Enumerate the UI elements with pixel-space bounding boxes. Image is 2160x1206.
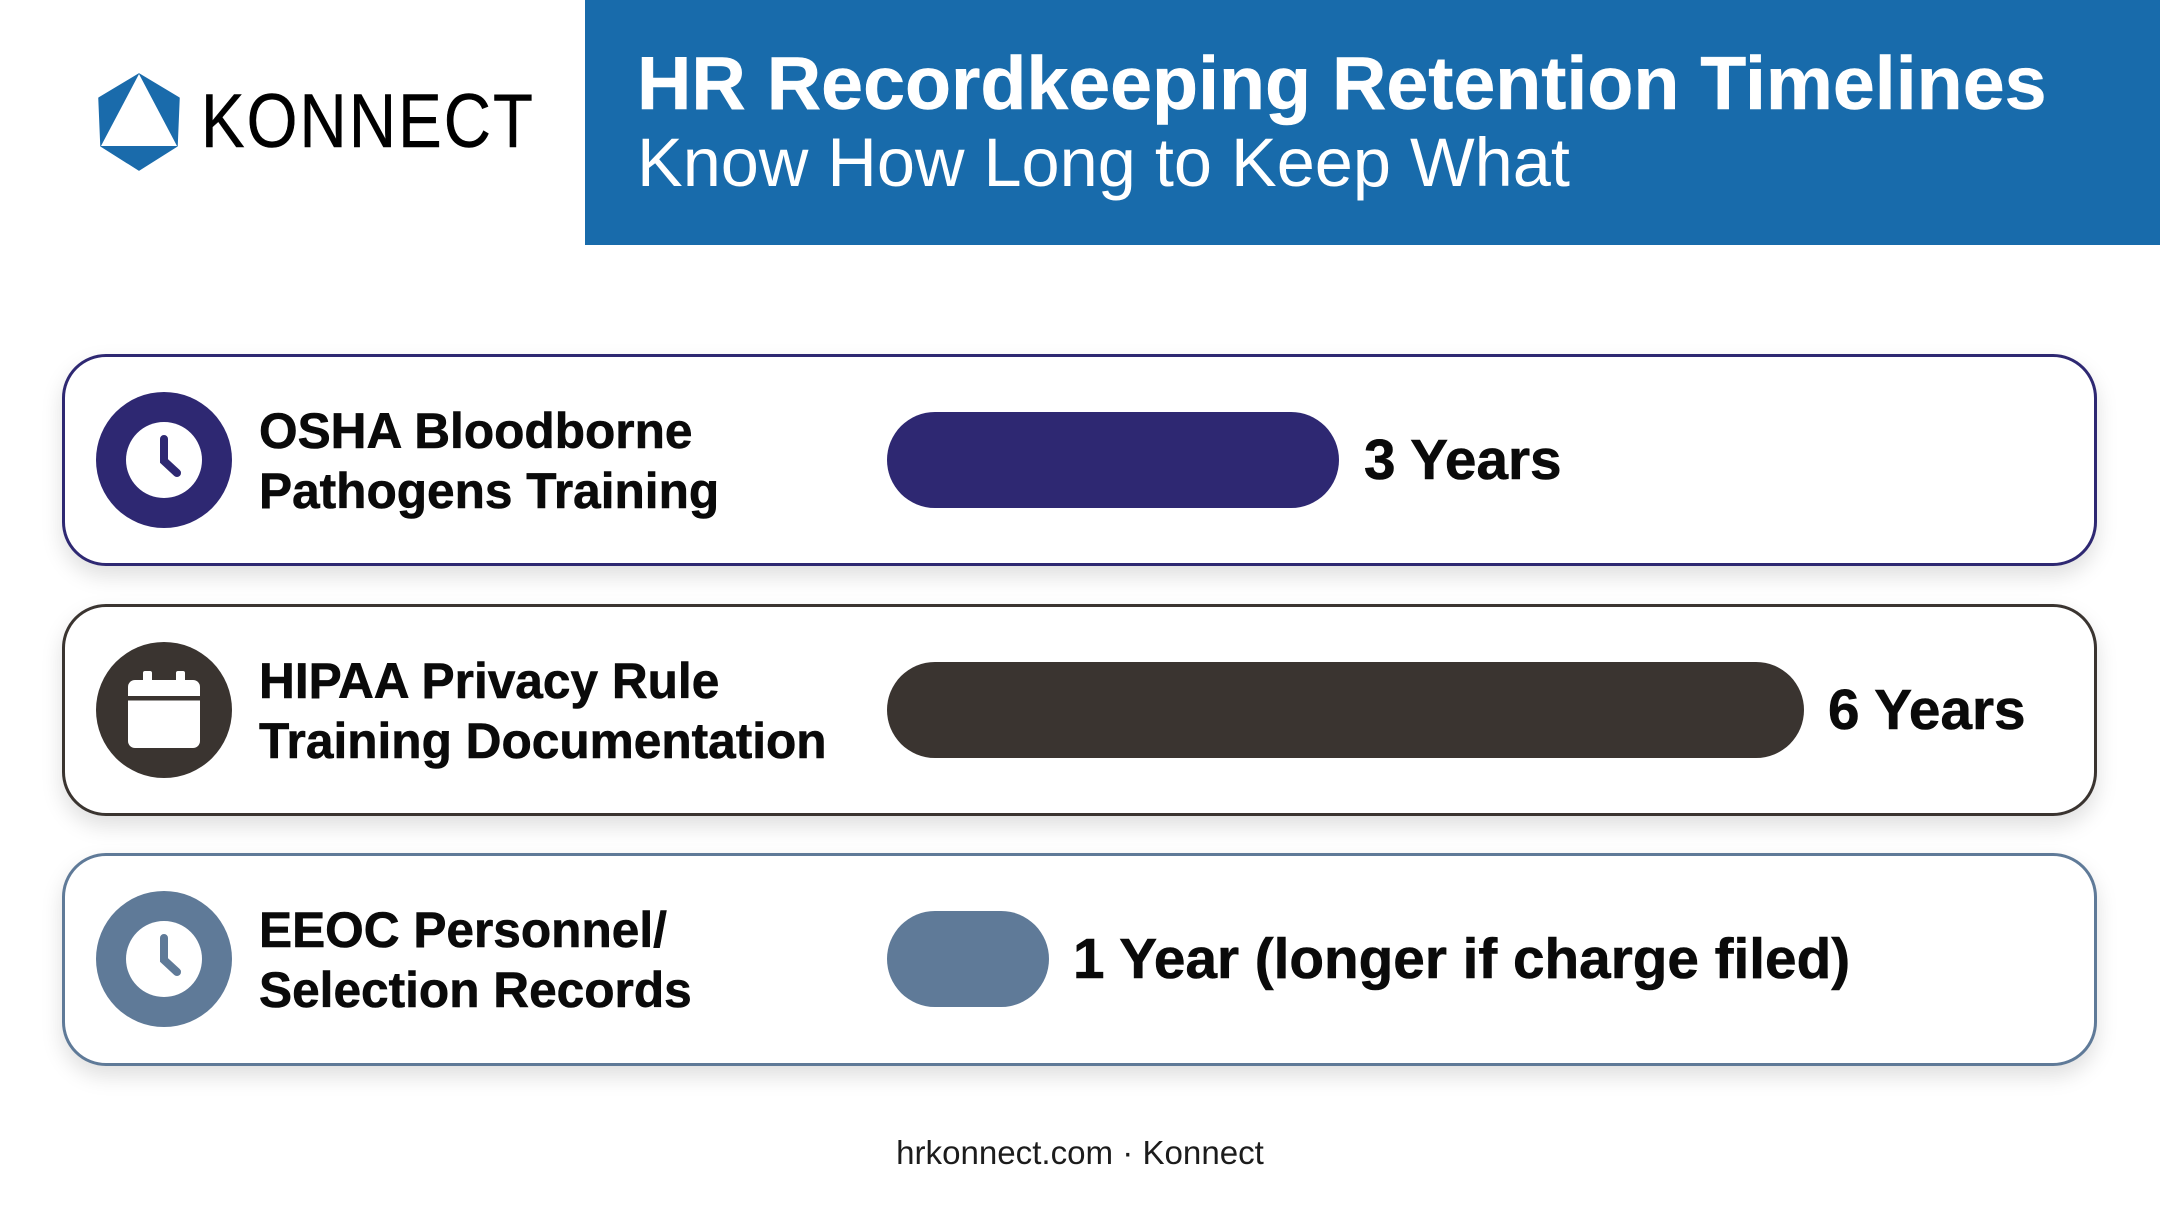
icon: clock [96, 891, 232, 1027]
label: EEOC [259, 902, 692, 1018]
bar: 6 years [887, 662, 1804, 758]
title: HR Recordkeeping Retention Timelines [637, 41, 2046, 125]
subtitle: Know How Long to Keep What [637, 124, 1570, 201]
icon: clock [96, 392, 232, 528]
label: HIPAA: HIPAA Privacy Rule [259, 653, 719, 709]
value: 3 years: 3 Years [1364, 429, 1562, 492]
panel: HIPAA row [62, 604, 2097, 816]
panel: OSHA row [62, 354, 2097, 566]
label: HIPAA [259, 653, 827, 769]
panel: EEOC row [62, 853, 2097, 1066]
footer: hrkonnect.com · Konnect [896, 1135, 1264, 1172]
logo [98, 73, 533, 171]
icon: logo hexagon [99, 74, 179, 170]
bar: 1 year [887, 911, 1049, 1007]
label: OSHA [259, 403, 719, 519]
value: 1 year: 1 Year (longer if charge filed) [1073, 928, 1850, 991]
value: 6 years: 6 Years [1828, 679, 2026, 742]
icon: calendar [96, 642, 232, 778]
label: EEOC: EEOC Personnel/ [259, 902, 667, 958]
label: EEOC: Selection Records [259, 962, 692, 1018]
logo wordmark: KONNECT [201, 79, 533, 164]
label: OSHA: OSHA Bloodborne [259, 403, 692, 459]
label: OSHA: Pathogens Training [259, 463, 719, 519]
header banner [585, 0, 2160, 245]
bar: 3 years [887, 412, 1339, 508]
label: HIPAA: Training Documentation [259, 713, 827, 769]
